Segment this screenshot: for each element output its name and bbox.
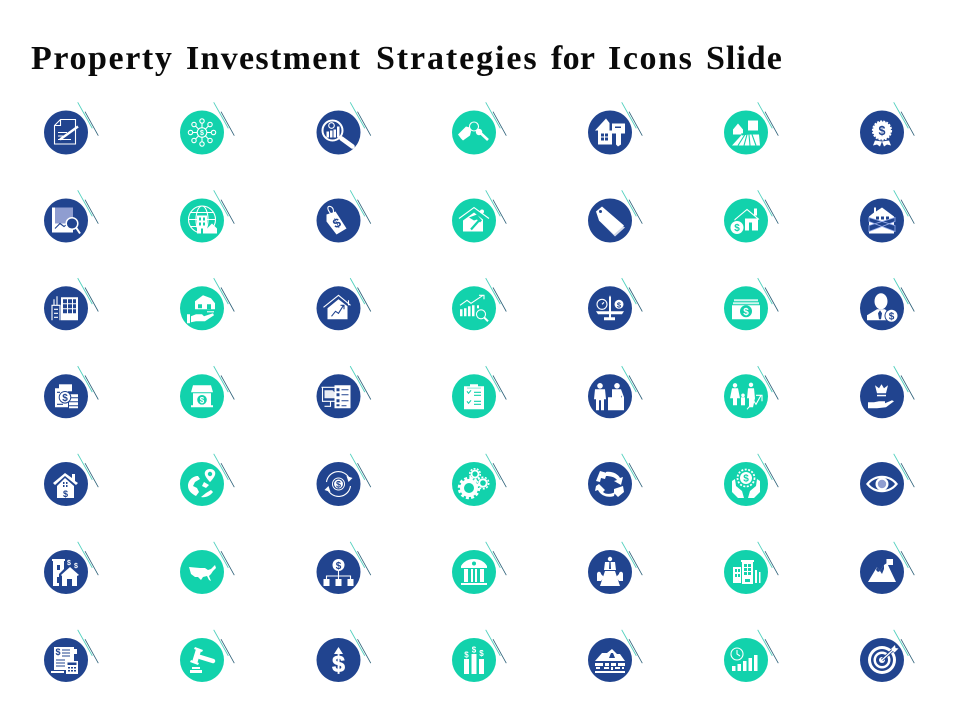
title: Strategies [376,40,539,77]
icon: buildings with house and dollars: $ [74,563,78,570]
icon: exchange arrows [588,454,642,506]
icon: businessman with coin: $ [889,311,895,322]
icon: dollar bars: $ [464,650,469,660]
icon: house with crossed tape [860,190,914,242]
icon: gears [452,454,506,506]
icon: balance scale: $ [617,300,622,309]
icon: house and key [588,102,642,154]
icon: circular arrows with dollar: $ [336,480,341,490]
icon: shop with dollar: $ [200,396,205,405]
icon: eye [860,454,914,506]
icon: documents and coins: $ [62,393,68,404]
icon: dollar award badge: $ [879,124,886,138]
icon: boardroom meeting [588,542,642,594]
icon: dollar price tag [316,190,371,242]
icon: city buildings [724,542,778,594]
icon: money network [180,102,234,154]
icon: dollar bars [452,630,506,682]
title: for [551,40,595,77]
icon: house with hammer [452,190,506,242]
icon: dollar award badge [860,102,914,154]
icon: target with arrow [860,630,914,682]
icon: invoice and calculator: $ [55,647,61,657]
icon: family with arrow [724,366,778,418]
icon: blank tags [588,190,642,242]
icon: globe with location pin [180,454,234,506]
icon: dollar with up arrow [316,630,371,682]
icon: report with magnifier [44,190,98,242]
title: Investment [186,40,361,77]
icon: house with dollar coin: $ [734,223,740,234]
icon: house with dollar [44,454,98,506]
icon: hand with crown [860,366,914,418]
icon: two people at desk [588,366,642,418]
icon: balance scale [588,278,642,330]
icon: house keys [452,102,506,154]
icon: circular arrows with dollar [316,454,371,506]
icon: dollar bars: $ [479,649,484,658]
icon: hands with coin: $ [743,474,749,484]
icon: USA map [180,542,234,594]
icon: businessman with coin [860,278,914,330]
icon: banknotes: $ [743,307,749,318]
icon: chart with magnifier [452,278,506,330]
icon: gavel [180,630,234,682]
icon: buildings with house and dollars [44,542,98,594]
title: Property [31,40,173,77]
icon: dollar org chart: $ [336,561,342,572]
icon: clock and growing bars [724,630,778,682]
title: Slide [706,40,783,77]
icon: invoice and calculator [44,630,98,682]
icon: dollar bars: $ [472,646,477,654]
icon: clipboard checklist [452,366,506,418]
icon: office buildings [44,278,98,330]
icon: global real estate [180,190,234,242]
icon: documents and coins [44,366,98,418]
icon: mountain with flag [860,542,914,594]
icon: brick house [588,630,642,682]
icon: hand holding house [180,278,234,330]
icon: shop with dollar [180,366,234,418]
icon: bank building [452,542,506,594]
icon: dollar org chart [316,542,371,594]
icon: house with growth line [316,278,371,330]
icon: money network: $ [200,130,204,137]
icon: magnifier with chart [316,102,371,154]
icon: house with dollar coin [724,190,778,242]
icon: buildings with house and dollars: $ [67,560,71,567]
icon: house with dollar: $ [63,489,68,499]
title [31,40,783,77]
icon: signed document [44,102,98,154]
title: Icons [608,40,693,77]
icon: monitor and checklist [316,366,371,418]
icon: dollar price tag: $ [330,214,344,231]
icon: farm land [724,102,778,154]
icon: dollar with up arrow: $ [332,651,345,677]
icon: hands with coin [724,454,778,506]
icon: banknotes [724,278,778,330]
